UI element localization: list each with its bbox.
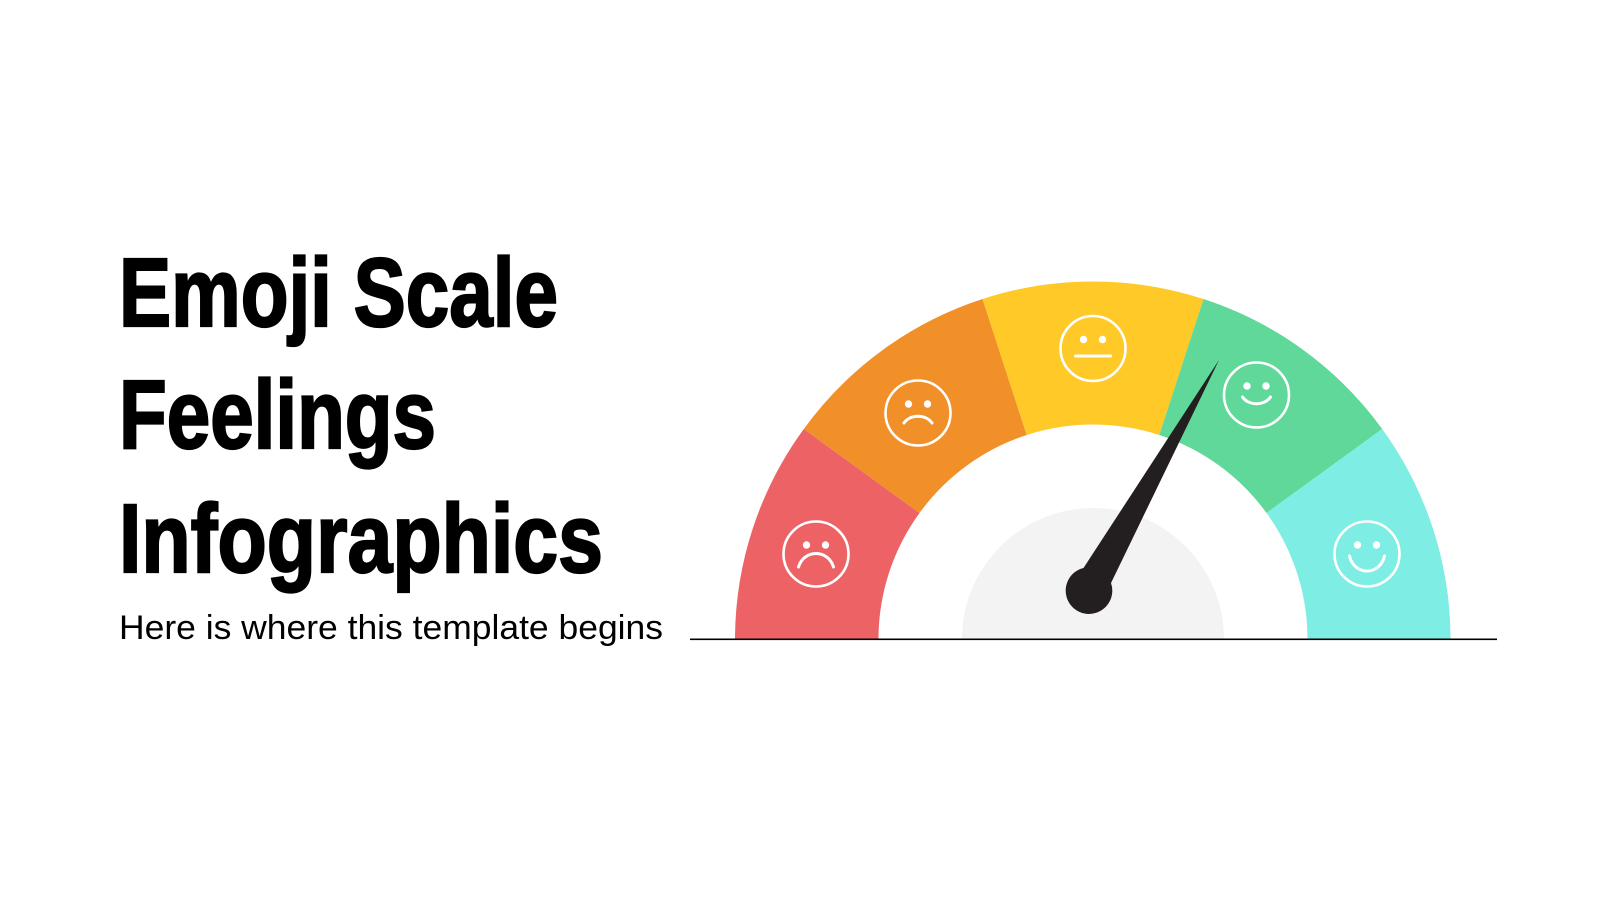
title: Emoji Scale xyxy=(119,238,558,347)
title: Infographics xyxy=(119,484,603,593)
gauge segment: green xyxy=(1159,299,1382,513)
icon: happy face xyxy=(1224,362,1289,428)
gauge needle xyxy=(1066,360,1219,614)
icon: sad face xyxy=(886,380,950,446)
icon: neutral face xyxy=(1060,316,1126,381)
gauge inner grey dial xyxy=(962,508,1224,639)
icon: very sad face xyxy=(784,522,848,586)
gauge segment: yellow xyxy=(982,281,1204,435)
gauge segment: red xyxy=(735,429,920,639)
title xyxy=(119,238,603,593)
baseline xyxy=(690,638,1497,640)
gauge xyxy=(690,281,1497,640)
gauge segment: cyan xyxy=(1266,429,1450,639)
gauge segment: orange xyxy=(804,299,1027,513)
icon: very happy face xyxy=(1334,522,1400,586)
subtitle: Here is where this template begins xyxy=(119,609,663,647)
title: Feelings xyxy=(119,360,436,469)
